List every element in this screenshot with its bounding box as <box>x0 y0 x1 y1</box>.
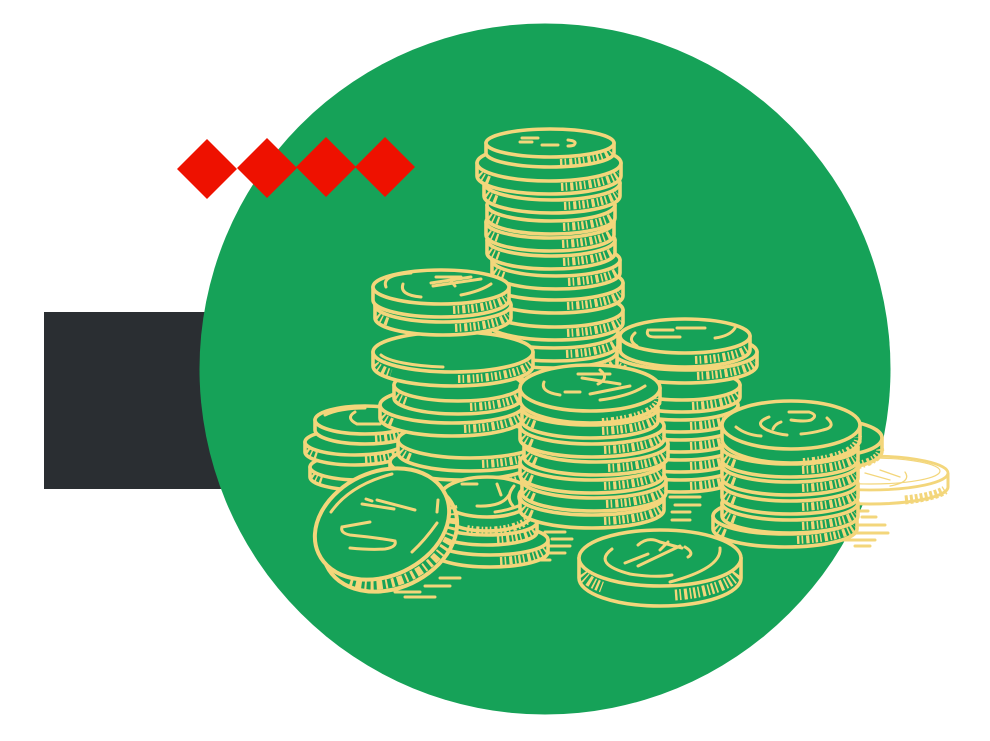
coin stack: front right <box>713 401 882 547</box>
green circle background <box>200 24 890 714</box>
coin stack: tall center <box>477 129 623 381</box>
coin stack: left <box>373 270 542 493</box>
red diamonds row <box>177 137 415 199</box>
engraved shadow dashes on the ground <box>395 489 888 597</box>
coin: front flat <box>579 530 741 606</box>
coin: leaning in front <box>297 447 475 613</box>
coin stack: back right <box>613 319 757 492</box>
dark rectangle behind circle <box>44 312 234 489</box>
coin stack: center front <box>520 365 668 528</box>
coin stack: behind leaning coin <box>432 477 548 567</box>
coin stack: small left <box>305 406 415 490</box>
faded coin at right edge <box>792 456 948 504</box>
